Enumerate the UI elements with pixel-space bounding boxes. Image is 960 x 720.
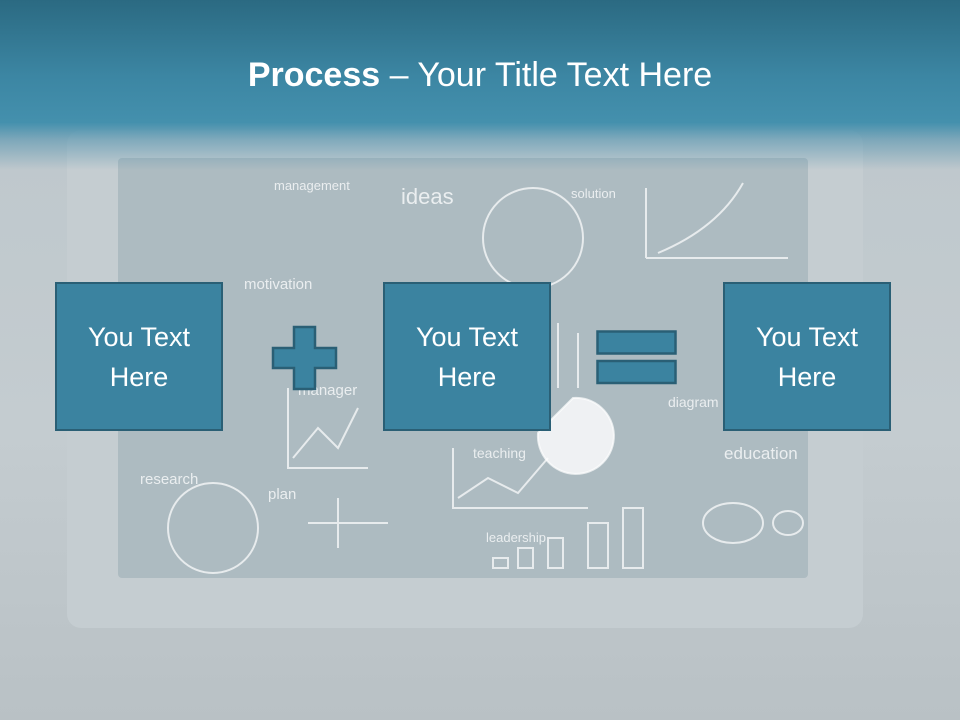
sketch labels: education — [724, 444, 798, 463]
tablet frame — [67, 130, 863, 628]
sketch labels: motivation — [244, 276, 312, 293]
sketch labels: manager — [298, 382, 357, 399]
tablet screen with sketches — [118, 158, 808, 578]
box 1: You Text — [88, 322, 190, 352]
box 2: Here — [438, 362, 496, 392]
box 2 — [383, 282, 551, 431]
sketch labels — [140, 178, 804, 574]
sketch labels: solution — [571, 186, 616, 201]
box 3: You Text — [756, 322, 858, 352]
sketch labels: leadership — [486, 530, 546, 545]
box 1 — [55, 282, 223, 431]
sketch labels: plan — [268, 486, 296, 503]
title: Process – Your Title Text Here — [248, 56, 712, 94]
sketch labels: management — [274, 178, 350, 193]
sketch labels: ideas — [401, 184, 454, 209]
icon: plus — [272, 326, 338, 390]
sketch labels: teaching — [473, 445, 526, 461]
box 1: Here — [110, 362, 168, 392]
icon: equals — [596, 330, 677, 384]
header band — [0, 0, 960, 170]
sketch labels: diagram — [668, 394, 719, 410]
box 2: You Text — [416, 322, 518, 352]
box 3 — [723, 282, 891, 431]
sketch labels: research — [140, 471, 198, 488]
box 3: Here — [778, 362, 836, 392]
